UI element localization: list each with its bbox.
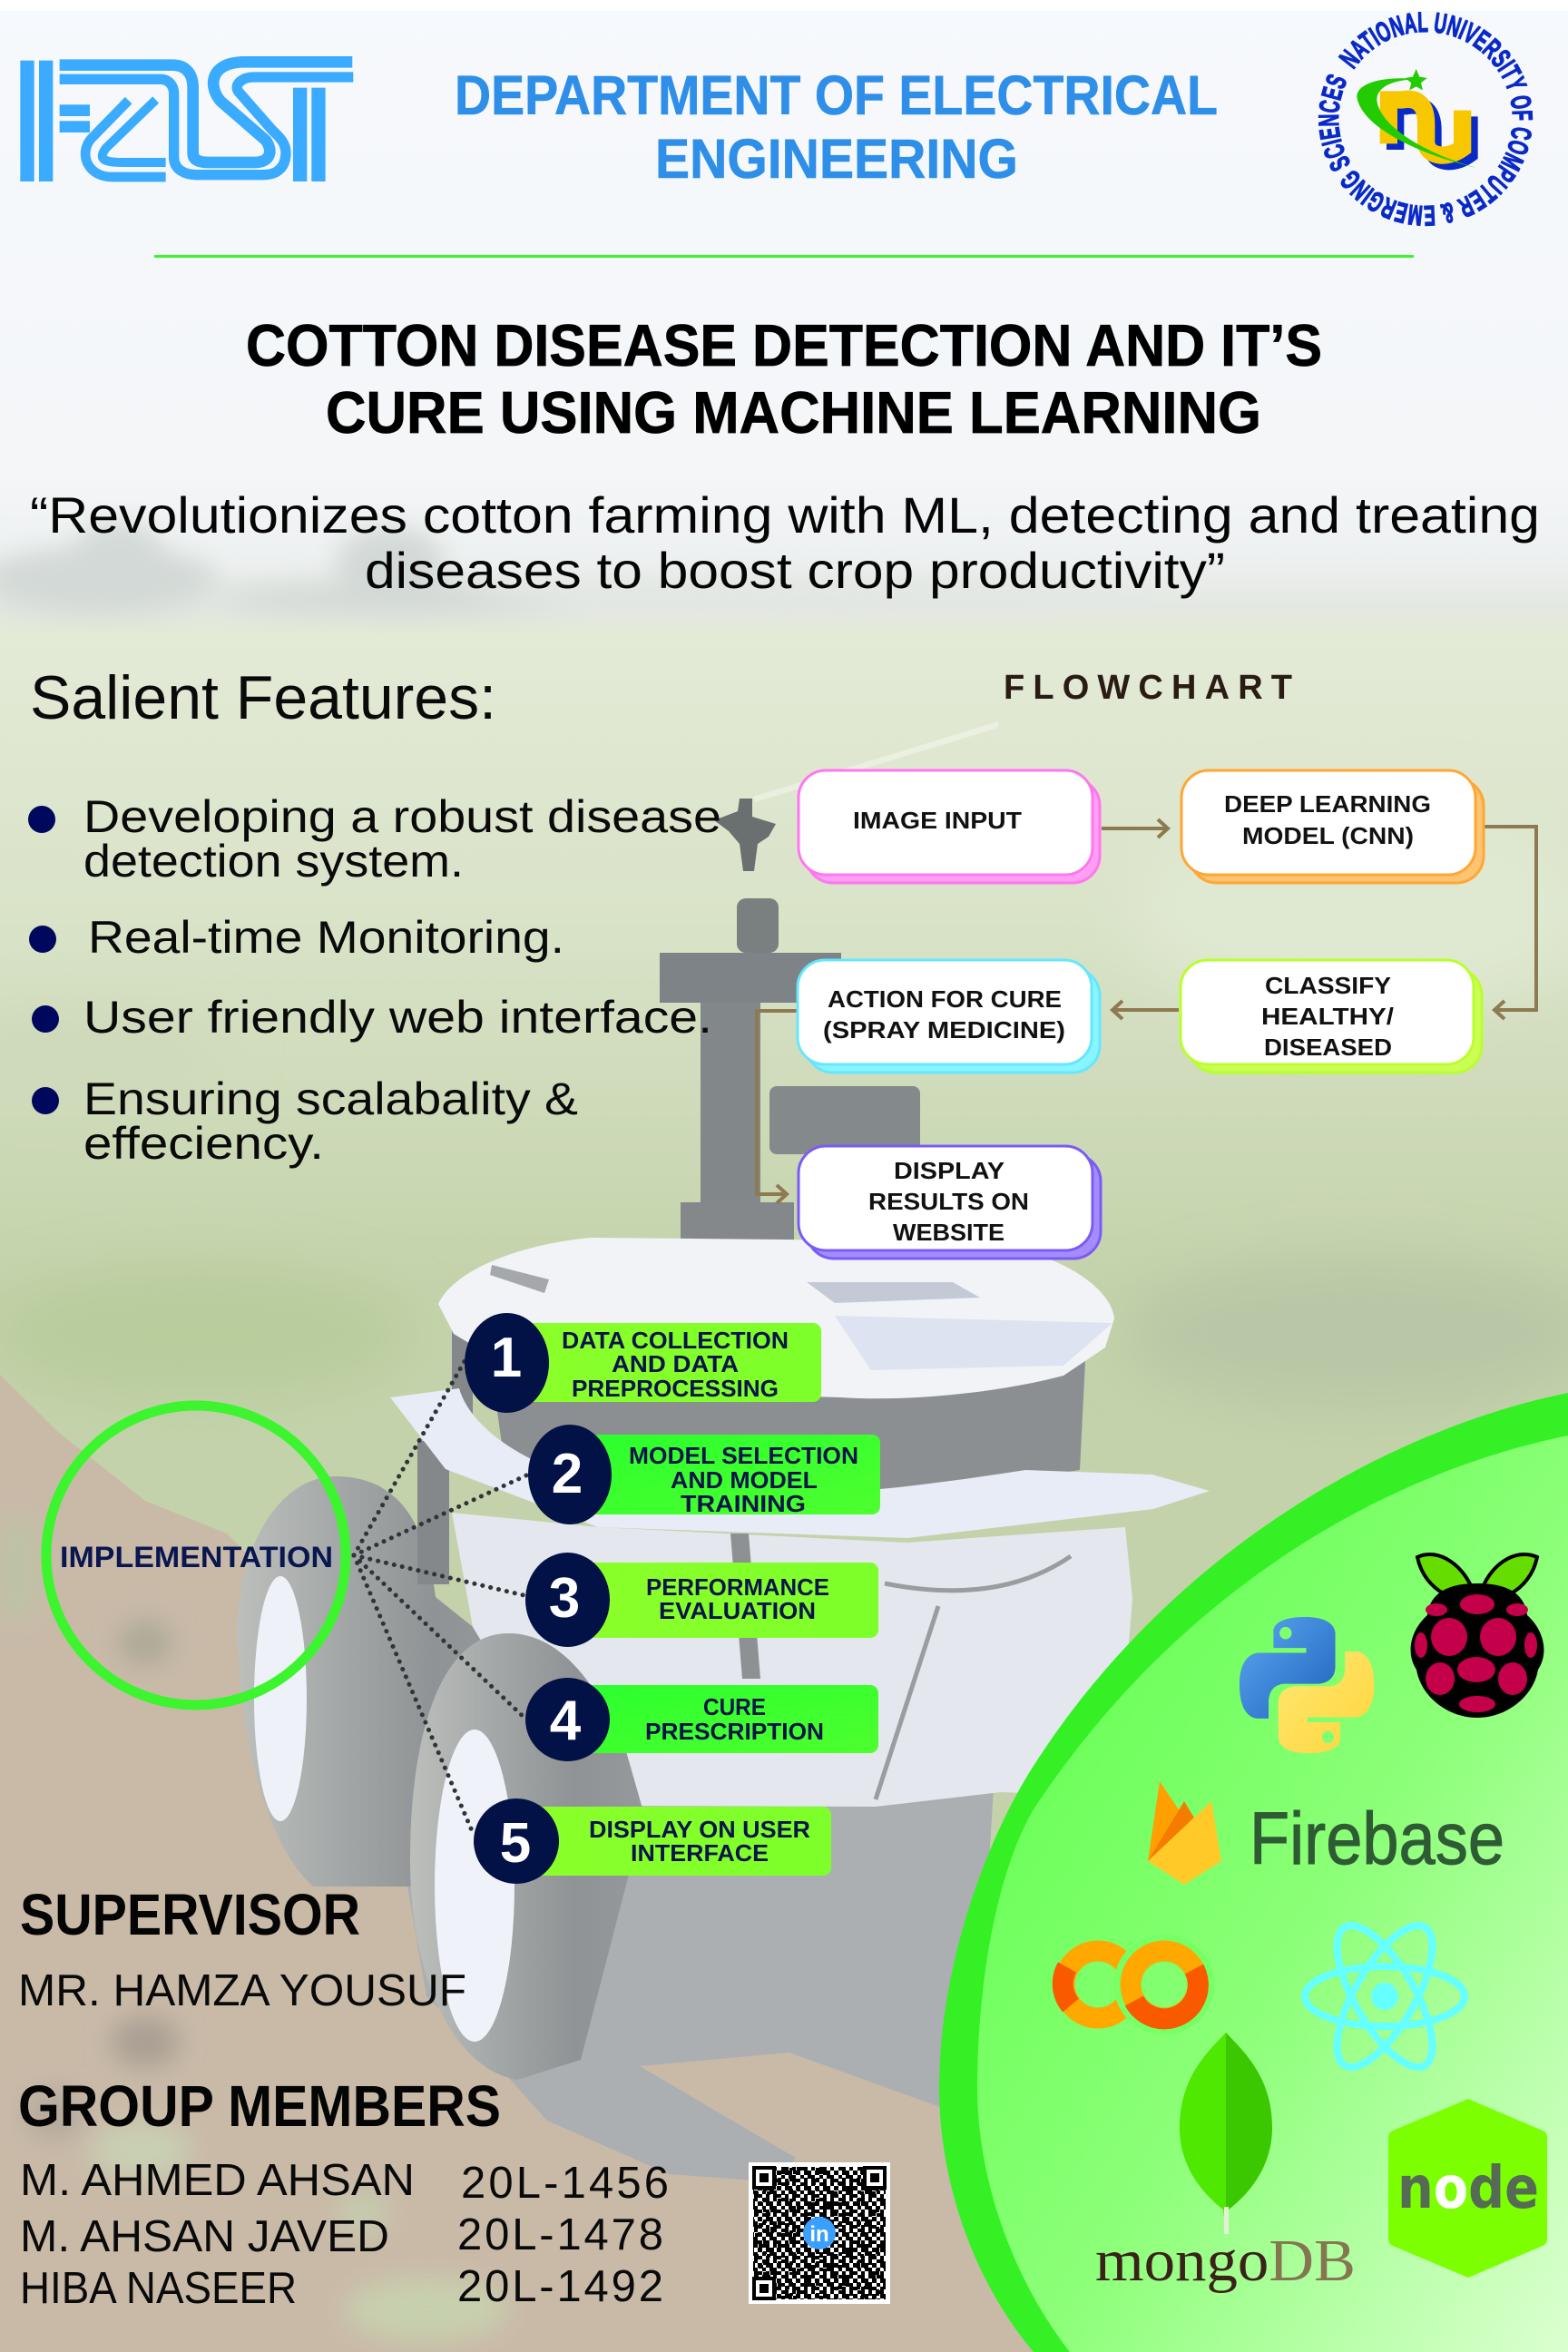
- step 2: AND MODEL: [671, 1466, 818, 1494]
- box: action for cure: ACTION FOR CURE: [828, 985, 1062, 1013]
- main title: CURE USING MACHINE LEARNING: [326, 379, 1261, 446]
- robot: pillars: [417, 1318, 473, 1584]
- header: FAST logo: [20, 61, 353, 181]
- group members block: M. AHSAN JAVED: [20, 2212, 389, 2261]
- main title: [246, 312, 1322, 446]
- step 1: [465, 1313, 821, 1413]
- box: display results: [799, 1146, 1101, 1259]
- bullet 1: detection system.: [83, 836, 464, 887]
- step 2: TRAINING: [681, 1490, 806, 1517]
- supervisor block: SUPERVISOR: [20, 1882, 360, 1947]
- step 5: INTERFACE: [631, 1839, 769, 1867]
- step 4: 4: [550, 1690, 582, 1752]
- group members block: HIBA NASEER: [20, 2264, 297, 2313]
- robot: ground shadow: [390, 1788, 994, 2182]
- box: deep learning model: [1181, 770, 1484, 883]
- step 3: [525, 1553, 878, 1647]
- icon: node: [1388, 2099, 1547, 2278]
- bullet 3: User friendly web interface.: [83, 992, 712, 1043]
- tagline: “Revolutionizes cotton farming with ML, detecting and treating: [30, 486, 1540, 544]
- box: action for cure: [798, 960, 1100, 1073]
- implementation circle: IMPLEMENTATION: [60, 1541, 333, 1573]
- icon: google colab: [1063, 1948, 1200, 2021]
- icon: raspberry pi: [1411, 1554, 1544, 1718]
- box: image input: IMAGE INPUT: [853, 807, 1022, 834]
- box: deep learning model: MODEL (CNN): [1242, 822, 1414, 849]
- step 2: 2: [552, 1443, 583, 1505]
- bullet 4: effeciency.: [83, 1118, 324, 1169]
- flow arrows: [757, 819, 1536, 1203]
- group members block: 20L-1478: [457, 2210, 663, 2259]
- group members block: 20L-1492: [457, 2262, 663, 2311]
- treeline haze: [0, 522, 1161, 615]
- divider line: [154, 255, 1414, 258]
- field shading: [0, 799, 1568, 1406]
- salient features list: [28, 791, 721, 1169]
- group members block: 20L-1456: [461, 2159, 669, 2208]
- box: classify: [1181, 960, 1482, 1073]
- implementation diagram: [46, 1313, 880, 1884]
- group members block: [18, 2073, 669, 2313]
- QR code: [749, 2162, 890, 2304]
- bullet 1: [28, 791, 721, 887]
- main title: COTTON DISEASE DETECTION AND IT’S: [246, 312, 1322, 378]
- robot: electronics bay: [490, 1361, 1085, 1497]
- step 1: AND DATA: [612, 1350, 739, 1377]
- header: NU logo: NATIONAL UNIVERSITY OF COMPUTER & EMERGING SCIENCES: [1318, 12, 1534, 227]
- firebase wordmark: Firebase: [1250, 1798, 1504, 1880]
- icon: mongodb leaf: [1180, 2033, 1272, 2234]
- header: department title: ENGINEERING: [655, 128, 1018, 190]
- bullet 4: [32, 1073, 578, 1169]
- dirt path: [0, 1375, 1089, 2352]
- box: image input: [799, 770, 1100, 883]
- implementation circle: [46, 1406, 346, 1705]
- step 2: [528, 1425, 880, 1524]
- group members block: M. AHMED AHSAN: [20, 2156, 415, 2205]
- box: classify: HEALTHY/: [1261, 1003, 1394, 1030]
- step 4: [525, 1678, 878, 1761]
- bullet 4: Ensuring scalabality &: [83, 1073, 578, 1124]
- supervisor block: MR. HAMZA YOUSUF: [18, 1966, 466, 2015]
- QR code: in: [809, 2222, 829, 2247]
- step 1: PREPROCESSING: [572, 1375, 779, 1402]
- step 5: [474, 1798, 831, 1884]
- step 3: EVALUATION: [659, 1597, 816, 1624]
- step 4: PRESCRIPTION: [645, 1718, 824, 1745]
- tagline: [30, 486, 1540, 599]
- robot: dome: [438, 1238, 1114, 1398]
- mongodb wordmark: mongoDB: [1095, 2228, 1356, 2294]
- box: display results: WEBSITE: [893, 1219, 1004, 1246]
- robot: lower body: [452, 1513, 1132, 1807]
- icon: python: [1240, 1617, 1374, 1753]
- step 5: DISPLAY ON USER: [589, 1816, 810, 1843]
- icon: firebase: [1148, 1781, 1221, 1885]
- step 2: MODEL SELECTION: [629, 1442, 858, 1469]
- robot: rear wheel: [238, 1476, 517, 1886]
- header: department title: [455, 64, 1218, 190]
- step 1: DATA COLLECTION: [562, 1327, 789, 1354]
- flowchart heading: FLOWCHART: [1004, 669, 1292, 707]
- panel: tech stack: [939, 1393, 1568, 2352]
- salient features heading: Salient Features:: [30, 663, 496, 732]
- box: classify: DISEASED: [1264, 1034, 1392, 1061]
- supervisor block: [18, 1882, 466, 2015]
- box: deep learning model: DEEP LEARNING: [1224, 790, 1431, 818]
- implementation connectors: [354, 1361, 528, 1835]
- bullet 2: Real-time Monitoring.: [88, 912, 564, 963]
- flowchart: [757, 770, 1536, 1259]
- robot: mast and sprinkler: [660, 721, 998, 1261]
- box: action for cure: (SPRAY MEDICINE): [823, 1016, 1065, 1044]
- bullet 1: Developing a robust disease: [83, 791, 721, 842]
- robot: front wheel: [410, 1633, 644, 2080]
- step 5: 5: [500, 1812, 531, 1875]
- box: display results: RESULTS ON: [868, 1188, 1029, 1215]
- step 3: 3: [549, 1567, 580, 1630]
- icon: node: node: [1397, 2155, 1539, 2222]
- tagline: diseases to boost crop productivity”: [365, 542, 1225, 599]
- step 1: 1: [491, 1327, 522, 1389]
- robot: shelf: [390, 1388, 1210, 1538]
- step 3: PERFORMANCE: [646, 1573, 829, 1601]
- icon: react: [1305, 1912, 1465, 2081]
- box: classify: CLASSIFY: [1265, 972, 1391, 999]
- header: department title: DEPARTMENT OF ELECTRICAL: [455, 64, 1218, 126]
- group members block: GROUP MEMBERS: [18, 2073, 501, 2139]
- box: display results: DISPLAY: [894, 1157, 1004, 1184]
- step 4: CURE: [703, 1693, 766, 1720]
